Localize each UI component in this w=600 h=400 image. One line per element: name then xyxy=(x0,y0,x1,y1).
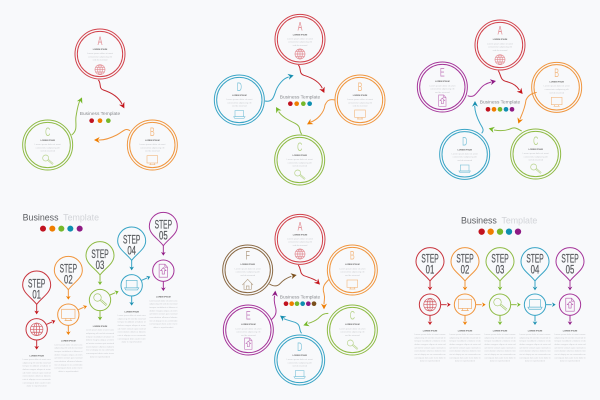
step 05: ad minim veniam quis nostrud ex xyxy=(554,346,586,349)
node C: Lorem ipsum dolor sit amet xyxy=(287,158,313,161)
node B: Lorem ipsum dolor sit amet xyxy=(347,98,373,101)
step 04: nisi ut aliquip ex ea commodo con xyxy=(519,353,551,356)
node B xyxy=(532,62,582,112)
step 02: ad minim veniam quis nostrud xyxy=(54,357,82,360)
node B: LOREM IPSUM xyxy=(549,81,564,83)
node A xyxy=(275,214,325,264)
node D: LOREM IPSUM xyxy=(457,149,472,151)
node A: A xyxy=(298,221,303,234)
step 01: dolor in reprehenderit xyxy=(420,360,440,363)
node A: consectetur adipiscing elit xyxy=(488,46,512,49)
node B: LOREM IPSUM xyxy=(145,140,160,142)
step 01: ad minim veniam quis nostrud ex xyxy=(414,346,446,349)
node D: Lorem ipsum dolor sit amet xyxy=(226,98,253,101)
step 03: consequat duis aute irure xyxy=(86,352,115,355)
node A: A xyxy=(298,21,303,34)
node D: sed do eiusmod xyxy=(232,106,247,108)
node E: sed do eiusmod xyxy=(241,335,256,337)
node C: C xyxy=(350,310,355,323)
step 01: dolore magna aliqua ut enim ad xyxy=(414,343,446,346)
node C: sed do eiusmod xyxy=(528,160,543,162)
node D: consectetur adipiscing elit xyxy=(227,101,252,104)
step 02: adipiscing elit sed do eiusmod xyxy=(54,347,82,350)
step 01: STEP xyxy=(28,277,45,290)
step 03: ad minim veniam quis nostrud ex xyxy=(484,346,516,349)
step 02: STEP xyxy=(60,263,77,276)
step 02: Lorem ipsum dolor sit amet consec xyxy=(449,333,481,336)
step 01: adipiscing elit sed do eiusmod xyxy=(23,361,51,364)
arrow D to E xyxy=(472,101,483,133)
step 02: exercitation ullamco laboris xyxy=(54,360,82,363)
step 02: consequat duis aute irure dolor in xyxy=(449,356,481,359)
arrow A to B xyxy=(298,265,322,287)
color dots xyxy=(288,101,312,106)
arrow C to D xyxy=(488,125,522,133)
step 03: 03 xyxy=(496,264,504,277)
node C xyxy=(275,135,325,185)
panel: horizontal steps timeline xyxy=(414,215,587,363)
node D: D xyxy=(297,341,302,355)
step 04: STEP xyxy=(123,233,140,246)
step 03: exercitation ullamco laboris nisi xyxy=(484,350,516,353)
node C: consectetur adipiscing elit xyxy=(288,161,312,164)
step 02: dolore magna aliqua ut enim xyxy=(54,353,83,356)
node C: consectetur adipiscing elit xyxy=(524,155,548,158)
step 05: consequat duis aute irure dolor in xyxy=(554,356,586,359)
step 01: Lorem ipsum dolor sit amet consec xyxy=(414,333,446,336)
step 05 xyxy=(149,212,178,329)
node C: LOREM IPSUM xyxy=(40,140,55,142)
node E: LOREM IPSUM xyxy=(241,324,256,326)
node F xyxy=(223,245,273,295)
step 04: ad minim veniam quis nostrud ex xyxy=(519,346,551,349)
arrow E to F xyxy=(271,290,278,320)
step 02: 02 xyxy=(461,264,469,277)
node C: C xyxy=(297,141,302,155)
heading: BusinessTemplate xyxy=(23,213,99,223)
node F: Lorem ipsum dolor sit amet xyxy=(235,267,261,270)
step 05: Lorem ipsum dolor sit amet cons xyxy=(149,299,177,302)
node B: Lorem ipsum dolor sit amet xyxy=(139,143,166,146)
panel: rising steps timeline xyxy=(23,212,178,388)
center title: Business Template xyxy=(280,94,321,100)
step 04: dolore magna aliqua ut enim xyxy=(118,324,146,327)
panel: six-step cycle xyxy=(223,214,377,385)
step 03: Lorem ipsum dolor sit amet consec xyxy=(484,333,516,336)
node A: consectetur adipiscing elit xyxy=(88,55,112,58)
step 05: dolor in reprehenderit xyxy=(153,326,174,329)
arrow A to B xyxy=(298,65,327,94)
node D: D xyxy=(462,136,467,149)
node A xyxy=(475,20,525,70)
step 02: exercitation ullamco laboris nisi xyxy=(449,350,481,353)
node C: LOREM IPSUM xyxy=(345,324,360,326)
step 05: tempor incididunt ut labore et xyxy=(149,306,178,309)
node B: sed do eiusmod xyxy=(145,151,160,153)
node A: A xyxy=(98,35,103,49)
step 02: STEP xyxy=(456,253,474,266)
step 05 xyxy=(554,248,587,363)
node C: Lorem ipsum dolor sit amet xyxy=(523,152,549,155)
node C: sed do eiusmod xyxy=(292,166,307,168)
node A: consectetur adipiscing elit xyxy=(288,241,312,244)
node E xyxy=(223,305,273,355)
step 04: LOREM IPSUM xyxy=(528,330,543,332)
node B: B xyxy=(150,126,155,140)
step 03: dolore magna aliqua ut enim ad xyxy=(484,343,516,346)
node A xyxy=(275,14,325,64)
step 01: consequat duis aute irure xyxy=(23,381,52,384)
node A: Lorem ipsum dolor sit amet xyxy=(487,42,513,45)
node D: sed do eiusmod xyxy=(292,366,307,368)
step 01: tempor incididunt ut labore et do xyxy=(414,340,447,343)
step 01: nisi ut aliquip ex ea commodo con xyxy=(414,353,446,356)
step 02: nisi ut aliquip ex ea commodo con xyxy=(449,353,481,356)
node A: Lorem ipsum dolor sit amet xyxy=(87,52,113,55)
step 01: LOREM IPSUM xyxy=(423,330,438,332)
node A: LOREM IPSUM xyxy=(93,49,108,51)
step 02: dolor in reprehenderit xyxy=(58,370,79,373)
step 04: exercitation ullamco laboris nisi xyxy=(519,350,551,353)
step 03: tempor incididunt ut labore et xyxy=(86,335,114,338)
node D: sed do eiusmod xyxy=(457,160,472,162)
step 03: nisi ut aliquip ex ea commodo con xyxy=(484,353,516,356)
step 04: nisi ut aliquip ex ea commodo xyxy=(118,334,147,337)
node C: C xyxy=(533,135,538,149)
step 01: exercitation ullamco laboris xyxy=(23,375,51,378)
step 01: dolore magna aliqua ut enim xyxy=(23,368,51,371)
step 01: LOREM IPSUM xyxy=(29,355,44,357)
step 04: tempor incididunt ut labore et xyxy=(118,321,146,324)
node C: consectetur adipiscing elit xyxy=(36,146,60,149)
step 01: STEP xyxy=(421,253,439,266)
node E: LOREM IPSUM xyxy=(435,81,450,83)
step 05: exercitation ullamco laboris nisi xyxy=(554,350,586,353)
node C: sed do eiusmod xyxy=(345,335,360,337)
step 03: LOREM IPSUM xyxy=(493,330,508,332)
step 01: nisi ut aliquip ex ea commodo xyxy=(23,378,52,381)
node C xyxy=(327,305,377,355)
step 05: Lorem ipsum dolor sit amet consec xyxy=(554,333,586,336)
node D xyxy=(214,75,264,125)
node C: Lorem ipsum dolor sit amet xyxy=(35,143,61,146)
node B xyxy=(127,120,177,170)
node C: sed do eiusmod xyxy=(40,151,55,153)
node E xyxy=(417,62,467,112)
step 04: exercitation ullamco laboris xyxy=(118,331,146,334)
node B: consectetur adipiscing elit xyxy=(340,271,365,274)
step 05: exercitation ullamco laboris xyxy=(149,316,177,319)
node A: LOREM IPSUM xyxy=(293,234,308,236)
step 03: adipiscing elit sed do eiusmod xyxy=(86,332,114,335)
arrow A to B xyxy=(498,71,525,96)
step 04: LOREM IPSUM xyxy=(124,311,139,313)
step 02: consequat duis aute irure xyxy=(54,367,83,370)
arrow B to C xyxy=(94,129,130,143)
node B: consectetur adipiscing elit xyxy=(140,146,165,149)
step 03: STEP xyxy=(491,253,509,266)
step 04: ad minim veniam quis nostrud xyxy=(118,327,146,330)
step 03: dolore magna aliqua ut enim xyxy=(86,339,114,342)
step 03: 03 xyxy=(96,259,104,272)
step 03: tempor incididunt ut labore et do xyxy=(484,340,517,343)
step 04: 04 xyxy=(127,244,136,257)
step 05: nisi ut aliquip ex ea commodo con xyxy=(554,353,586,356)
node B: B xyxy=(554,67,559,81)
node C xyxy=(511,129,561,179)
step 03 xyxy=(86,242,120,358)
node F: sed do eiusmod xyxy=(240,275,255,277)
node F: LOREM IPSUM xyxy=(240,264,255,266)
step 01: dolor in reprehenderit xyxy=(27,385,47,388)
step 04: dolore magna aliqua ut enim ad xyxy=(519,343,551,346)
node B: sed do eiusmod xyxy=(353,106,367,108)
step 04: dolor in reprehenderit xyxy=(525,360,545,363)
node D xyxy=(275,335,325,385)
step 04: consequat duis aute irure xyxy=(118,337,147,340)
node D: D xyxy=(237,81,242,95)
step 02: nisi ut aliquip ex ea commodo xyxy=(54,363,83,366)
color dots xyxy=(478,228,521,235)
arrow B to C xyxy=(305,100,335,127)
step 03: consequat duis aute irure dolor in xyxy=(484,356,516,359)
center title: Business Template xyxy=(280,294,321,300)
node C: LOREM IPSUM xyxy=(292,155,307,157)
arrow C to A xyxy=(72,96,85,135)
step 02: tempor incididunt ut labore et do xyxy=(449,340,482,343)
node C: Lorem ipsum dolor sit amet xyxy=(339,327,366,330)
step 01: tempor incididunt ut labore et xyxy=(23,365,51,368)
node E: sed do eiusmod xyxy=(435,92,450,94)
panel: three-step cycle xyxy=(23,29,177,170)
step 05: ad minim veniam quis nostrud xyxy=(149,313,177,316)
step 04: consequat duis aute irure dolor in xyxy=(519,356,551,359)
step 02: tempor incididunt ut labore et xyxy=(54,350,83,353)
step 05: dolore magna aliqua ut enim xyxy=(149,309,178,312)
node A: sed do eiusmod xyxy=(493,50,507,52)
node B: B xyxy=(358,81,363,95)
color dots xyxy=(89,118,111,123)
node A: LOREM IPSUM xyxy=(493,39,508,41)
step 04 xyxy=(118,227,151,344)
node B: Lorem ipsum dolor sit amet xyxy=(339,267,366,270)
step 02: Lorem ipsum dolor sit amet cons xyxy=(54,343,82,346)
step 05: 05 xyxy=(566,264,574,277)
step 05: consequat duis aute irure xyxy=(149,323,178,326)
step 01: 01 xyxy=(32,288,41,301)
step 02: dolor in reprehenderit xyxy=(455,360,475,363)
step 02: 02 xyxy=(64,274,73,287)
node D: LOREM IPSUM xyxy=(292,355,307,357)
step 03: Lorem ipsum dolor sit amet cons xyxy=(86,329,114,332)
node E: E xyxy=(440,67,445,80)
color dots xyxy=(40,226,83,232)
node C: C xyxy=(45,126,50,140)
node B: LOREM IPSUM xyxy=(353,95,368,97)
step 05: adipiscing elit sed do eiusmod xyxy=(149,303,177,306)
node A: Lorem ipsum dolor sit amet xyxy=(287,237,313,240)
panel: five-step cycle xyxy=(417,20,582,179)
node B: Lorem ipsum dolor sit amet xyxy=(544,85,570,88)
step 03: LOREM IPSUM xyxy=(93,326,108,328)
step 03: STEP xyxy=(91,248,109,261)
step 05: STEP xyxy=(155,219,172,232)
color dots xyxy=(284,301,316,306)
node A: LOREM IPSUM xyxy=(293,34,308,36)
step 02 xyxy=(54,256,88,373)
step 01: adipiscing elit sed do eiusmod te xyxy=(414,336,447,339)
step 02: dolore magna aliqua ut enim ad xyxy=(449,343,481,346)
step 05: 05 xyxy=(159,230,168,243)
node A: sed do eiusmod xyxy=(293,245,307,247)
step 01: 01 xyxy=(426,264,434,277)
step 04: 04 xyxy=(531,264,540,277)
arrow C to D xyxy=(302,313,328,328)
node B: sed do eiusmod xyxy=(345,275,360,277)
arrow D to A xyxy=(265,72,294,101)
heading: BusinessTemplate xyxy=(461,215,537,225)
step 04: dolor in reprehenderit xyxy=(122,341,142,344)
panel: four-step cycle xyxy=(214,14,385,185)
node B xyxy=(327,245,377,295)
node F: consectetur adipiscing elit xyxy=(236,271,260,274)
step 04: STEP xyxy=(526,253,544,266)
step 04: Lorem ipsum dolor sit amet cons xyxy=(118,314,146,317)
node F: F xyxy=(245,250,250,263)
arrow B to C xyxy=(516,92,537,125)
node E: Lorem ipsum dolor sit amet xyxy=(429,84,456,87)
step 01 xyxy=(23,271,56,388)
center title: Business Template xyxy=(480,100,521,106)
node E: Lorem ipsum dolor sit amet xyxy=(235,327,262,330)
node A: consectetur adipiscing elit xyxy=(288,41,312,44)
step 01: ad minim veniam quis nostrud xyxy=(23,371,51,374)
node E: E xyxy=(246,310,251,323)
step 02: LOREM IPSUM xyxy=(458,330,473,332)
step 05: STEP xyxy=(561,253,579,266)
step 05: LOREM IPSUM xyxy=(563,330,578,332)
step 05: LOREM IPSUM xyxy=(156,297,171,299)
node C: consectetur adipiscing elit xyxy=(340,331,365,334)
node E: consectetur adipiscing elit xyxy=(236,331,261,334)
node A: A xyxy=(498,25,503,38)
step 03: dolor in reprehenderit xyxy=(490,360,510,363)
step 03: dolor in reprehenderit xyxy=(90,355,110,358)
arrow E to A xyxy=(468,78,497,96)
node C xyxy=(23,120,73,170)
step 05: tempor incididunt ut labore et do xyxy=(554,340,587,343)
node B: B xyxy=(350,250,355,263)
step 05: adipiscing elit sed do eiusmod te xyxy=(554,336,587,339)
node D: LOREM IPSUM xyxy=(232,95,247,97)
node A: sed do eiusmod xyxy=(93,60,107,62)
step 03: adipiscing elit sed do eiusmod te xyxy=(484,336,517,339)
step 03: ad minim veniam quis nostrud xyxy=(86,342,114,345)
step 02: LOREM IPSUM xyxy=(61,341,76,343)
arrow F to A xyxy=(269,272,297,286)
step 03: exercitation ullamco laboris xyxy=(86,345,114,348)
step 01: exercitation ullamco laboris nisi xyxy=(414,350,446,353)
node C: LOREM IPSUM xyxy=(528,149,543,151)
node D: Lorem ipsum dolor sit amet xyxy=(287,358,313,361)
center title: Business Template xyxy=(80,111,121,117)
step 05: nisi ut aliquip ex ea commodo xyxy=(149,319,178,322)
node D: Lorem ipsum dolor sit amet xyxy=(452,152,478,155)
step 03 xyxy=(484,248,521,363)
step 04 xyxy=(519,248,556,363)
node D xyxy=(440,129,490,179)
color dots xyxy=(486,107,514,112)
arrow A to B xyxy=(98,80,127,110)
step 02 xyxy=(449,248,486,363)
step 04: adipiscing elit sed do eiusmod xyxy=(118,317,146,320)
arrow B to C xyxy=(321,279,329,309)
step 05: dolor in reprehenderit xyxy=(560,360,580,363)
node A: sed do eiusmod xyxy=(293,45,307,47)
node B: sed do eiusmod xyxy=(549,92,564,94)
step 01: Lorem ipsum dolor sit amet cons xyxy=(23,358,51,361)
step 01 xyxy=(414,248,451,363)
step 03: nisi ut aliquip ex ea commodo xyxy=(86,349,115,352)
node B: consectetur adipiscing elit xyxy=(348,101,372,104)
node B: LOREM IPSUM xyxy=(345,264,360,266)
step 04: adipiscing elit sed do eiusmod te xyxy=(519,336,552,339)
node A: Lorem ipsum dolor sit amet xyxy=(287,37,313,40)
arrow C to D xyxy=(273,105,302,134)
node A xyxy=(75,29,125,79)
node D: consectetur adipiscing elit xyxy=(453,156,477,159)
node E: consectetur adipiscing elit xyxy=(430,88,455,91)
node D: consectetur adipiscing elit xyxy=(288,361,312,364)
step 01: consequat duis aute irure dolor in xyxy=(414,356,446,359)
step 02: adipiscing elit sed do eiusmod te xyxy=(449,336,482,339)
step 04: tempor incididunt ut labore et do xyxy=(519,340,552,343)
step 04: Lorem ipsum dolor sit amet consec xyxy=(519,333,551,336)
step 02: ad minim veniam quis nostrud ex xyxy=(449,346,481,349)
step 05: dolore magna aliqua ut enim ad xyxy=(554,343,586,346)
node B: consectetur adipiscing elit xyxy=(545,88,569,91)
node B xyxy=(335,75,385,125)
arrow D to E xyxy=(278,313,302,333)
